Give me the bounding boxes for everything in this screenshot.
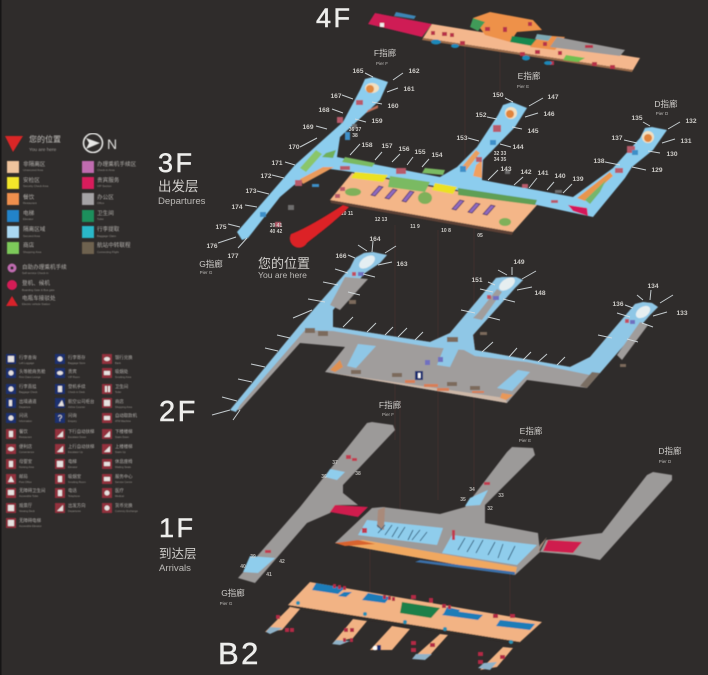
pier labels 3F: E指廊 <box>518 71 541 81</box>
legend: service icons: Waiting Seats <box>115 465 132 469</box>
gate numbers 1F: 33 <box>498 493 504 499</box>
legend: area colours: 餐饮 <box>23 193 35 201</box>
legend: service icons: 观景厅 <box>19 503 33 509</box>
legend: service icons: ? <box>58 414 63 423</box>
gate numbers 3F: 39 41 <box>270 223 282 229</box>
gate numbers 3F: 140 <box>554 173 566 180</box>
legend: service icons: ATM Machine <box>115 419 131 423</box>
legend: service icons: 下楼楼梯 <box>115 428 133 435</box>
legend: service icons: Convenience <box>19 450 35 454</box>
pier labels 1F <box>220 400 682 606</box>
floor title 3F: 出发层 <box>158 179 198 194</box>
gate numbers 3F: 145 <box>527 128 539 135</box>
legend: service icons: 吸烟处 <box>115 368 129 375</box>
gate numbers 3F: 129 <box>651 167 663 174</box>
legend: service icons: Smoking Room <box>68 480 86 484</box>
gate numbers 2F: 164 <box>369 236 381 243</box>
legend: service icons: 电梯 <box>68 458 77 465</box>
legend: service icons: 贵宾 <box>68 368 77 375</box>
floor 2F map <box>230 252 658 412</box>
floor title 1F: 1F <box>159 513 196 543</box>
floor title 1F: 到达层 <box>159 547 197 561</box>
legend: map markers: 登机、候机 <box>22 279 50 287</box>
gate numbers 3F: 40 42 <box>270 229 282 235</box>
legend: service icons: 便利店 <box>19 443 33 450</box>
legend: service icons: 问询 <box>68 412 77 419</box>
legend: map markers: Self-service Check-in <box>22 271 49 275</box>
legend: map markers: 自助办理乘机手续 <box>22 263 67 271</box>
legend: area colours: 办公区 <box>97 193 114 201</box>
gate numbers 3F: 165 <box>352 68 364 75</box>
gate numbers 3F: 161 <box>403 86 415 93</box>
gate numbers 3F: 155 <box>414 149 426 156</box>
legend: service icons: Left Luggage <box>19 361 35 365</box>
legend: area colours: Security Check Area <box>23 184 49 188</box>
legend: service icons: 邮局 <box>19 473 28 480</box>
floor 4F map <box>368 12 640 72</box>
legend: area colours: 贵宾服务 <box>97 176 120 184</box>
legend: service icons: 上行自动扶梯 <box>68 443 95 450</box>
legend: service icons: Accessible Elevator <box>19 524 42 528</box>
gate numbers 1F <box>240 460 504 578</box>
legend: service icons: 出发方向 <box>68 502 86 509</box>
gate numbers 3F: 34 35 <box>494 157 506 163</box>
gate numbers 2F: 134 <box>647 283 659 290</box>
legend: service icons: Escalator Down <box>68 435 87 439</box>
gate numbers 2F: 133 <box>676 310 688 317</box>
gate numbers 3F: 169 <box>302 124 314 131</box>
gate numbers 1F: 37 <box>332 460 338 466</box>
gate numbers 2F: 149 <box>513 259 525 266</box>
you are here label: 您的位置 <box>258 256 310 271</box>
legend: service icons: 医疗 <box>115 487 124 494</box>
gate numbers 1F: 35 <box>460 497 466 503</box>
gate numbers 3F: 143 <box>500 166 512 173</box>
legend: area colours: 电梯 <box>23 209 35 217</box>
legend: service icons: Currency Exchange <box>115 509 138 513</box>
gate numbers 2F: 136 <box>612 301 624 308</box>
gate stubs 2F <box>212 241 673 420</box>
gate numbers 3F: 160 <box>387 103 399 110</box>
legend: service icons: Bank <box>115 361 122 365</box>
legend: service icons: 服务中心 <box>115 473 133 480</box>
gate numbers 3F: 10 8 <box>441 228 451 234</box>
gate numbers 3F: 36 37 <box>349 127 361 133</box>
legend: you are here and north: N <box>107 136 117 152</box>
legend: service icons: Shopping Area <box>115 405 133 409</box>
gate numbers 3F: 173 <box>245 188 257 195</box>
gate numbers 3F: 159 <box>371 118 383 125</box>
floor title 1F <box>159 513 197 574</box>
gate numbers 2F: 166 <box>335 253 347 260</box>
pier labels 1F: Pier E <box>519 438 531 443</box>
gate numbers 3F: 131 <box>680 138 692 145</box>
floor title B2: B2 <box>218 636 261 671</box>
legend: you are here and north: 您的位置 <box>29 134 61 144</box>
gate numbers 3F: 139 <box>572 176 584 183</box>
legend: area colours: Unsecured Area <box>23 168 44 172</box>
gate numbers 3F: 167 <box>330 93 342 100</box>
legend: service icons: 头等舱商务舱 <box>19 368 46 375</box>
gate numbers 3F: 147 <box>547 94 559 101</box>
legend: service icons: Stairs Up <box>115 450 126 454</box>
legend: area colours <box>7 160 137 254</box>
gate numbers 3F <box>206 68 697 260</box>
legend: service icons: 银行兑换 <box>115 354 133 361</box>
legend: service icons: Telephone <box>68 494 81 498</box>
legend: service icons: 无障碍电梯 <box>19 517 42 524</box>
legend: service icons: Stairs Down <box>115 435 130 439</box>
pier labels 1F: Pier F <box>382 412 394 417</box>
gate numbers 2F: 163 <box>396 261 408 268</box>
legend: service icons: 卫生间 <box>115 383 128 390</box>
legend: service icons: Elevator <box>68 465 78 469</box>
floor B2 map <box>265 582 542 670</box>
legend: map markers <box>6 263 67 306</box>
gate numbers 3F: 157 <box>381 143 393 150</box>
gate numbers 1F: 38 <box>355 471 361 477</box>
floor title 2F: 2F <box>159 396 198 428</box>
legend: service icons: Accessible Toilet <box>19 494 38 498</box>
legend: service icons: 休息座椅 <box>115 458 133 465</box>
pier labels 1F: F指廊 <box>379 400 402 410</box>
legend: service icons: 行李寄存 <box>68 354 86 361</box>
gate numbers 1F: 39 <box>250 554 256 560</box>
gate numbers 3F: 158 <box>361 142 373 149</box>
legend: service icons: Medical <box>115 494 124 498</box>
gate numbers 1F: 32 <box>487 506 493 512</box>
gate numbers 3F: 144 <box>512 144 524 151</box>
legend: service icons: 航空公司柜台 <box>68 398 95 405</box>
pier labels 3F: Pier D <box>656 111 669 116</box>
you are here label: You are here <box>258 270 307 280</box>
gate numbers 3F: 12 13 <box>375 217 387 223</box>
legend: area colours: 安检区 <box>23 176 40 184</box>
gate numbers 3F: 156 <box>398 146 410 153</box>
legend: service icons: Airline Counter <box>68 405 85 409</box>
legend: area colours: 行李提取 <box>97 225 120 233</box>
gate stubs 3F <box>218 73 680 248</box>
legend: area colours: 隔离区域 <box>23 225 46 233</box>
legend: area colours: Toilet <box>97 217 104 221</box>
pier labels 3F: G指廊 <box>199 259 223 269</box>
legend: service icons: Baggage Check <box>19 390 38 394</box>
gate numbers 3F: 38 <box>352 133 358 139</box>
legend: area colours: Connecting Flight <box>97 250 119 254</box>
pier labels 1F: E指廊 <box>520 426 543 436</box>
pier labels 1F: G指廊 <box>221 588 245 598</box>
gate numbers 3F: 154 <box>431 152 443 159</box>
gate numbers 2F: 151 <box>471 277 483 284</box>
legend: service icons: 吸烟室 <box>68 473 82 480</box>
legend: service icons: Information <box>19 419 33 423</box>
gate numbers 3F: 11 9 <box>410 224 420 230</box>
legend: service icons: Post Office <box>19 480 32 484</box>
floor title 1F: Arrivals <box>159 563 191 574</box>
gate numbers 3F: 177 <box>227 253 239 260</box>
legend: service icons: 行李查询 <box>19 354 37 361</box>
floor title 3F: Departures <box>158 196 206 207</box>
legend: area colours: Elevator <box>23 217 33 221</box>
floor 1F map <box>238 422 672 583</box>
legend: service icons: Smoking Area <box>115 375 132 379</box>
gate numbers 3F: 132 <box>685 118 697 125</box>
legend: service icons: Enquiry <box>68 419 77 423</box>
legend: service icons: Viewing Deck <box>19 509 35 513</box>
pier labels 1F: D指廊 <box>658 446 682 456</box>
legend: service icons: 餐饮 <box>19 428 28 435</box>
legend: you are here and north <box>5 134 117 153</box>
gate numbers 2F <box>335 236 688 317</box>
legend: area colours: VIP Section <box>97 184 112 188</box>
gate numbers 3F: 171 <box>271 160 283 167</box>
gate numbers 1F: 34 <box>469 487 475 493</box>
gate numbers 3F: 05 <box>477 233 483 239</box>
floor title 3F <box>158 148 206 207</box>
legend: service icons: 问讯 <box>19 412 28 419</box>
gate numbers 3F: 172 <box>260 173 272 180</box>
legend: service icons: 货币兑换 <box>115 502 133 509</box>
gate numbers 3F: 137 <box>611 135 623 142</box>
legend: service icons: First Class Lounge <box>19 375 41 379</box>
gate numbers 2F: 148 <box>534 290 546 297</box>
gate numbers 3F: 150 <box>492 92 504 99</box>
pier labels 3F: D指廊 <box>654 99 678 109</box>
legend: service icons: 登机手续 <box>68 383 86 390</box>
pier labels 3F: Pier E <box>517 84 529 89</box>
legend: area colours: 商店 <box>23 241 35 249</box>
legend: service icons <box>6 354 138 528</box>
gate numbers 3F: 32 33 <box>494 151 506 157</box>
gate numbers 3F: 141 <box>537 170 549 177</box>
legend: area colours: Shopping Area <box>23 250 42 254</box>
legend: service icons: 自动取款机 <box>115 412 138 419</box>
gate numbers 3F: 10 11 <box>341 211 353 217</box>
gate numbers 3F: 174 <box>231 204 243 211</box>
gate numbers 3F: 170 <box>288 144 300 151</box>
pier labels 1F: Pier G <box>220 601 233 606</box>
pier labels 1F: Pier D <box>659 459 672 464</box>
legend: service icons: 商店 <box>115 398 124 405</box>
legend: service icons: 无障碍卫生间 <box>19 487 45 494</box>
legend: area colours: 航站中转联程 <box>97 241 131 249</box>
legend: service icons: 行李直挂 <box>19 383 37 390</box>
gate numbers 3F: 138 <box>593 158 605 165</box>
legend: service icons: Service Centre <box>115 480 133 484</box>
legend: service icons: Escalator Up <box>68 450 83 454</box>
floor title 3F: 3F <box>158 148 195 178</box>
legend: map markers: Electric vehicle Station <box>22 302 51 306</box>
pier labels 3F: Pier F <box>376 61 388 66</box>
gate numbers 3F: 146 <box>543 111 555 118</box>
legend: service icons: Departure <box>19 405 31 409</box>
gate numbers 3F: 153 <box>456 135 468 142</box>
pier labels 3F <box>199 48 678 275</box>
gate numbers 3F: 135 <box>631 115 643 122</box>
gate numbers 3F: 175 <box>215 224 227 231</box>
legend: map markers: Boarding Gate & Bus gate <box>22 288 55 292</box>
pier labels 3F: F指廊 <box>374 48 397 58</box>
legend: service icons: 出境通道 <box>19 398 37 405</box>
legend: map markers: 电瓶车接驳处 <box>22 294 56 302</box>
legend: area colours: Restaurant <box>23 201 37 205</box>
gate numbers 3F: 168 <box>318 107 330 114</box>
legend: service icons: Nursing Area <box>19 465 35 469</box>
legend: service icons: Departures <box>68 509 82 513</box>
gate numbers 1F: 40 <box>240 564 246 570</box>
legend: area colours: Baggage Claim <box>97 234 117 238</box>
legend: service icons: 电话 <box>68 487 77 494</box>
legend: service icons: Restaurant <box>19 435 32 439</box>
gate numbers 3F: 142 <box>520 169 532 176</box>
gate numbers 1F: 42 <box>279 559 285 565</box>
gate numbers 1F: 36 <box>321 474 327 480</box>
legend: service icons: 母婴室 <box>19 458 33 465</box>
you are here label <box>258 256 310 280</box>
legend: area colours: 卫生间 <box>97 209 114 217</box>
legend: you are here and north: You are here <box>29 147 57 153</box>
legend: service icons: Check-in Desk <box>68 390 86 394</box>
legend: service icons: Baggage Store <box>68 361 86 365</box>
gate numbers 3F: 130 <box>666 151 678 158</box>
floor 3F map <box>237 77 667 240</box>
gate numbers 1F: 41 <box>266 572 272 578</box>
you are here pin <box>290 205 349 248</box>
legend: area colours: 办理乘机手续区 <box>97 160 137 168</box>
legend: area colours: 非隔离区 <box>23 160 46 168</box>
gate numbers 3F: 176 <box>206 243 218 250</box>
gate numbers 3F: 152 <box>475 112 487 119</box>
legend: service icons: Toilet <box>115 390 121 394</box>
legend: service icons: 下行自动扶梯 <box>68 428 95 435</box>
legend: service icons: 上楼楼梯 <box>115 443 133 450</box>
legend: area colours: Secured Area <box>23 234 40 238</box>
legend: area colours: Office <box>97 201 105 205</box>
pier labels 3F: Pier G <box>200 270 213 275</box>
legend: service icons: VIP Room <box>68 375 80 379</box>
legend: area colours: Check-in Area <box>97 168 115 172</box>
floor title 4F: 4F <box>316 3 353 33</box>
gate numbers 3F: 162 <box>408 68 420 75</box>
